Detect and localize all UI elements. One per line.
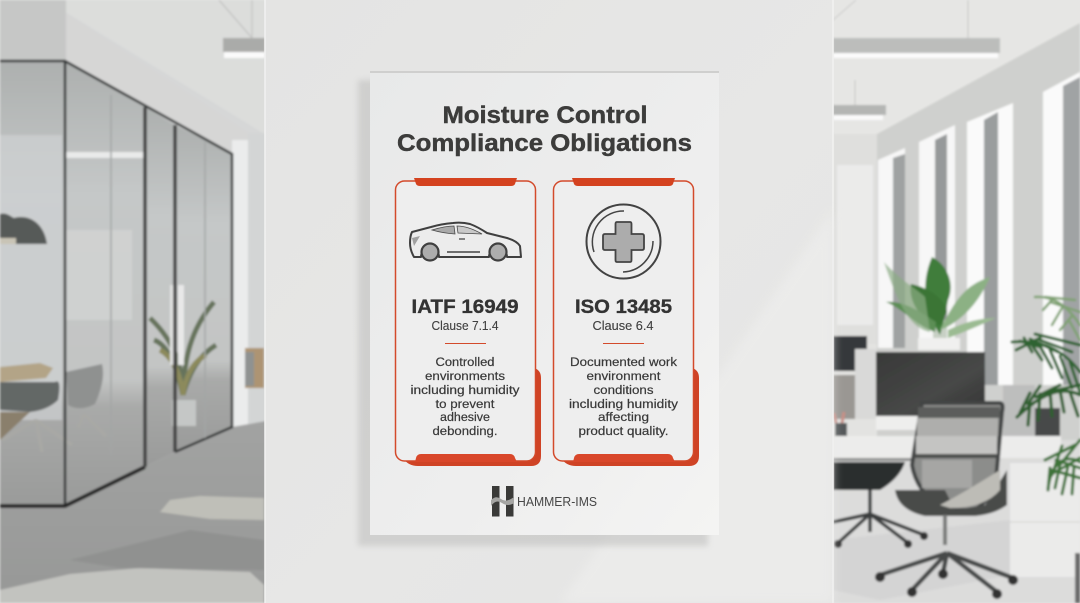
left office: glass meeting room (0, 0, 266, 603)
description: Controlled (436, 355, 494, 369)
description: including humidity (410, 383, 521, 397)
panel: ISO 13485 (554, 178, 699, 466)
clause: Clause 7.1.4 (432, 319, 499, 333)
panel: IATF 16949 (396, 178, 541, 466)
description: debonding. (432, 424, 498, 438)
description: including humidity (569, 397, 679, 411)
poster title: Compliance Obligations (397, 130, 692, 157)
plant behind monitor (884, 257, 996, 350)
logo: Hammer-IMS (491, 486, 597, 516)
icon: car (410, 223, 521, 260)
right office: windows, desk and plants (832, 0, 1080, 603)
second chair (833, 462, 928, 548)
poster title: Moisture Control (442, 102, 648, 129)
poster title (397, 102, 692, 157)
description: adhesive (440, 410, 490, 424)
description: environment (586, 369, 661, 383)
standard name: IATF 16949 (412, 297, 518, 318)
poster shadow (358, 80, 708, 546)
logo: Hammer-IMS: HAMMER-IMS (517, 494, 597, 509)
icon: medical cross (586, 204, 660, 278)
description: conditions (594, 383, 654, 397)
description: to prevent (436, 397, 495, 411)
description: product quality. (578, 424, 668, 438)
description: Documented work (570, 355, 678, 369)
clause: Clause 6.4 (592, 319, 654, 333)
description: affecting (598, 410, 649, 424)
office chair (875, 403, 1018, 599)
poster (370, 71, 719, 535)
palm plant (1012, 297, 1080, 494)
wall light streak (560, 210, 833, 603)
description: environments (425, 369, 505, 383)
standard name: ISO 13485 (575, 297, 672, 318)
centre wall (265, 0, 833, 603)
description (569, 355, 679, 438)
description (410, 355, 521, 438)
